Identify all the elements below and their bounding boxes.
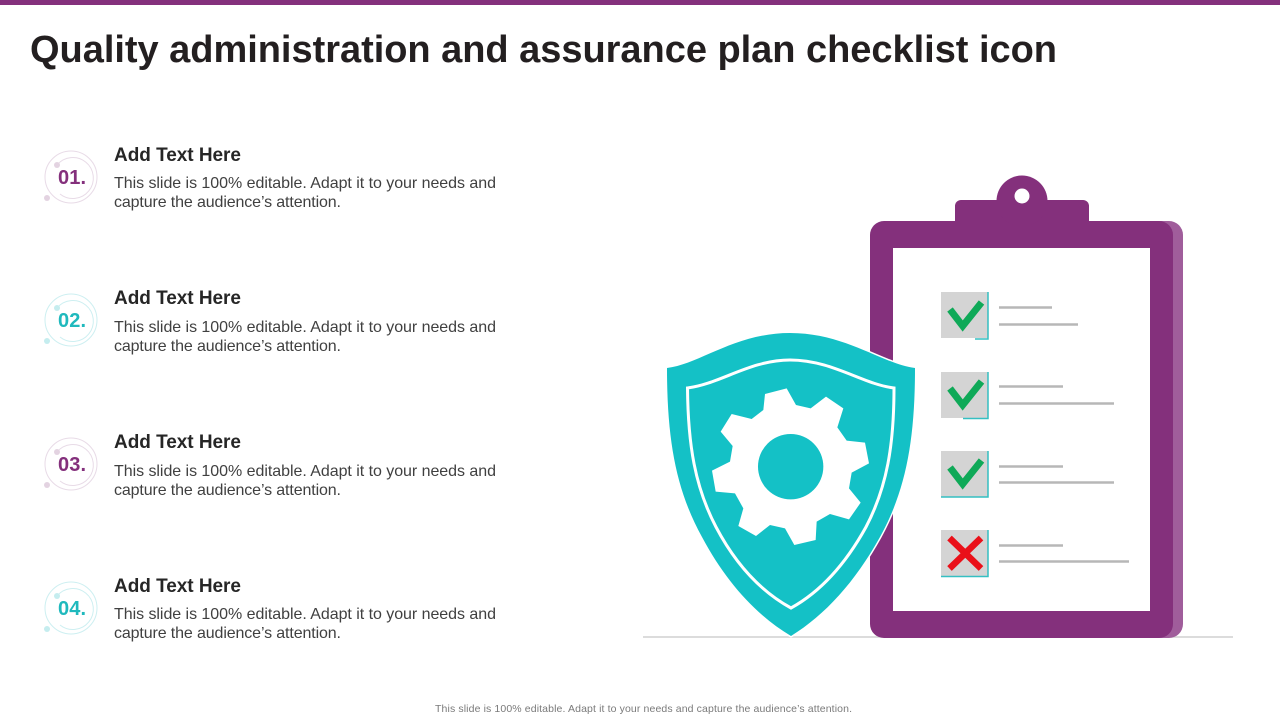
list item 03: [44, 432, 496, 499]
footer note: This slide is 100% editable. Adapt it to your needs and capture the audience’s attention.: [435, 703, 852, 715]
body text 03: capture the audience’s attention.: [114, 482, 341, 499]
body text 02: This slide is 100% editable. Adapt it to your needs and: [114, 319, 496, 336]
icon: clipboard checklist: [870, 176, 1183, 638]
heading 03: Add Text Here: [114, 432, 241, 453]
clipboard clip: [955, 176, 1089, 230]
body text 03: This slide is 100% editable. Adapt it to your needs and: [114, 463, 496, 480]
paper sheet: [893, 248, 1150, 611]
body text 02: capture the audience’s attention.: [114, 338, 341, 355]
checklist row 1: [941, 292, 1078, 339]
checklist row 4: [941, 530, 1129, 576]
body text 04: capture the audience’s attention.: [114, 625, 341, 642]
checklist row 3: [941, 451, 1114, 497]
body text 01: capture the audience’s attention.: [114, 194, 341, 211]
title: Quality administration and assurance plan checklist icon: [30, 29, 1057, 71]
shield body: [667, 333, 915, 636]
list item 02: [44, 288, 496, 355]
badge 04: 04.: [58, 598, 86, 620]
badge 02: 02.: [58, 310, 86, 332]
clipboard board: [870, 221, 1173, 638]
list item 01: [44, 145, 496, 211]
top accent bar: [0, 0, 1280, 5]
clipboard side shade: [1100, 221, 1183, 638]
badge 04: [44, 582, 97, 634]
badge 01: 01.: [58, 167, 86, 189]
body text 01: This slide is 100% editable. Adapt it to your needs and: [114, 175, 496, 192]
badge 02: [44, 294, 97, 346]
badge 03: 03.: [58, 454, 86, 476]
gear: [712, 388, 869, 545]
badge 01: [44, 151, 97, 203]
shield inner outline: [688, 360, 894, 608]
icon: shield with gear: [667, 333, 915, 636]
heading 02: Add Text Here: [114, 288, 241, 309]
floor line: [643, 636, 1233, 638]
badge 03: [44, 438, 97, 490]
heading 01: Add Text Here: [114, 145, 241, 166]
body text 04: This slide is 100% editable. Adapt it to your needs and: [114, 606, 496, 623]
heading 04: Add Text Here: [114, 576, 241, 597]
checklist row 2: [941, 372, 1114, 418]
list item 04: [44, 576, 496, 642]
